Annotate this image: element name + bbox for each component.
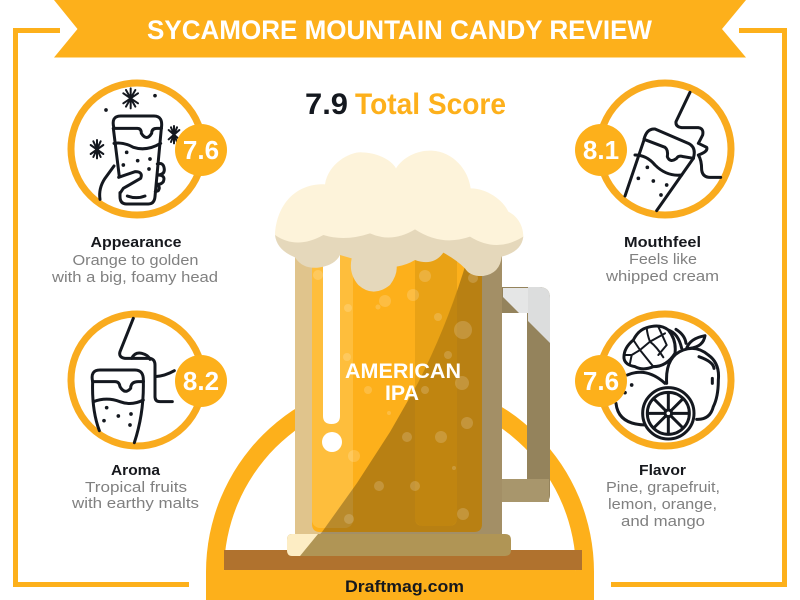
score badge bbox=[575, 355, 627, 407]
score badge: 7.6 bbox=[583, 366, 619, 396]
highlight bbox=[323, 250, 340, 424]
panel: appearance bbox=[51, 83, 227, 286]
description: and mango bbox=[621, 513, 705, 530]
title banner bbox=[54, 0, 746, 58]
score badge: 8.1 bbox=[583, 135, 619, 165]
label: Mouthfeel bbox=[624, 234, 701, 251]
description: whipped cream bbox=[605, 268, 719, 285]
panel: mouthfeel bbox=[575, 83, 731, 285]
total score: 7.9 bbox=[305, 88, 348, 121]
bubbles bbox=[313, 270, 478, 524]
beer mug bbox=[275, 151, 550, 556]
description: Tropical fruits bbox=[85, 479, 187, 496]
description: Orange to golden bbox=[72, 252, 198, 269]
description: with a big, foamy head bbox=[51, 269, 218, 286]
mug glass and beer bbox=[295, 250, 502, 556]
score badge: 8.2 bbox=[183, 366, 219, 396]
description bbox=[606, 479, 720, 530]
beer style label: AMERICAN bbox=[345, 360, 461, 383]
label: Appearance bbox=[90, 234, 182, 251]
description: with earthy malts bbox=[71, 495, 199, 512]
label: Flavor bbox=[639, 462, 686, 479]
description bbox=[71, 479, 199, 512]
icon: lips drinking beer bbox=[625, 92, 721, 211]
icon: nose smelling beer bbox=[92, 318, 174, 443]
source: Draftmag.com bbox=[345, 577, 464, 596]
label: Aroma bbox=[111, 462, 161, 479]
score badge bbox=[175, 355, 227, 407]
score badge: 7.6 bbox=[183, 135, 219, 165]
total score: Total Score bbox=[355, 88, 506, 121]
arc and table behind the mug bbox=[206, 378, 594, 600]
beer style label bbox=[345, 360, 461, 405]
panel: aroma bbox=[71, 314, 227, 512]
description bbox=[51, 252, 218, 286]
icon: hops and citrus fruit bbox=[616, 326, 719, 439]
score badge bbox=[175, 124, 227, 176]
beer foam bbox=[275, 151, 523, 292]
icon: hand holding beer bbox=[91, 88, 179, 204]
mug base bbox=[287, 534, 511, 556]
score badge bbox=[575, 124, 627, 176]
title: SYCAMORE MOUNTAIN CANDY REVIEW bbox=[147, 15, 652, 45]
description: Pine, grapefruit, bbox=[606, 479, 720, 496]
mug handle bbox=[500, 287, 550, 502]
beer style label: IPA bbox=[385, 382, 419, 405]
description bbox=[605, 251, 719, 285]
description: lemon, orange, bbox=[608, 496, 717, 513]
description: Feels like bbox=[629, 251, 697, 268]
panel: flavor bbox=[575, 314, 731, 530]
